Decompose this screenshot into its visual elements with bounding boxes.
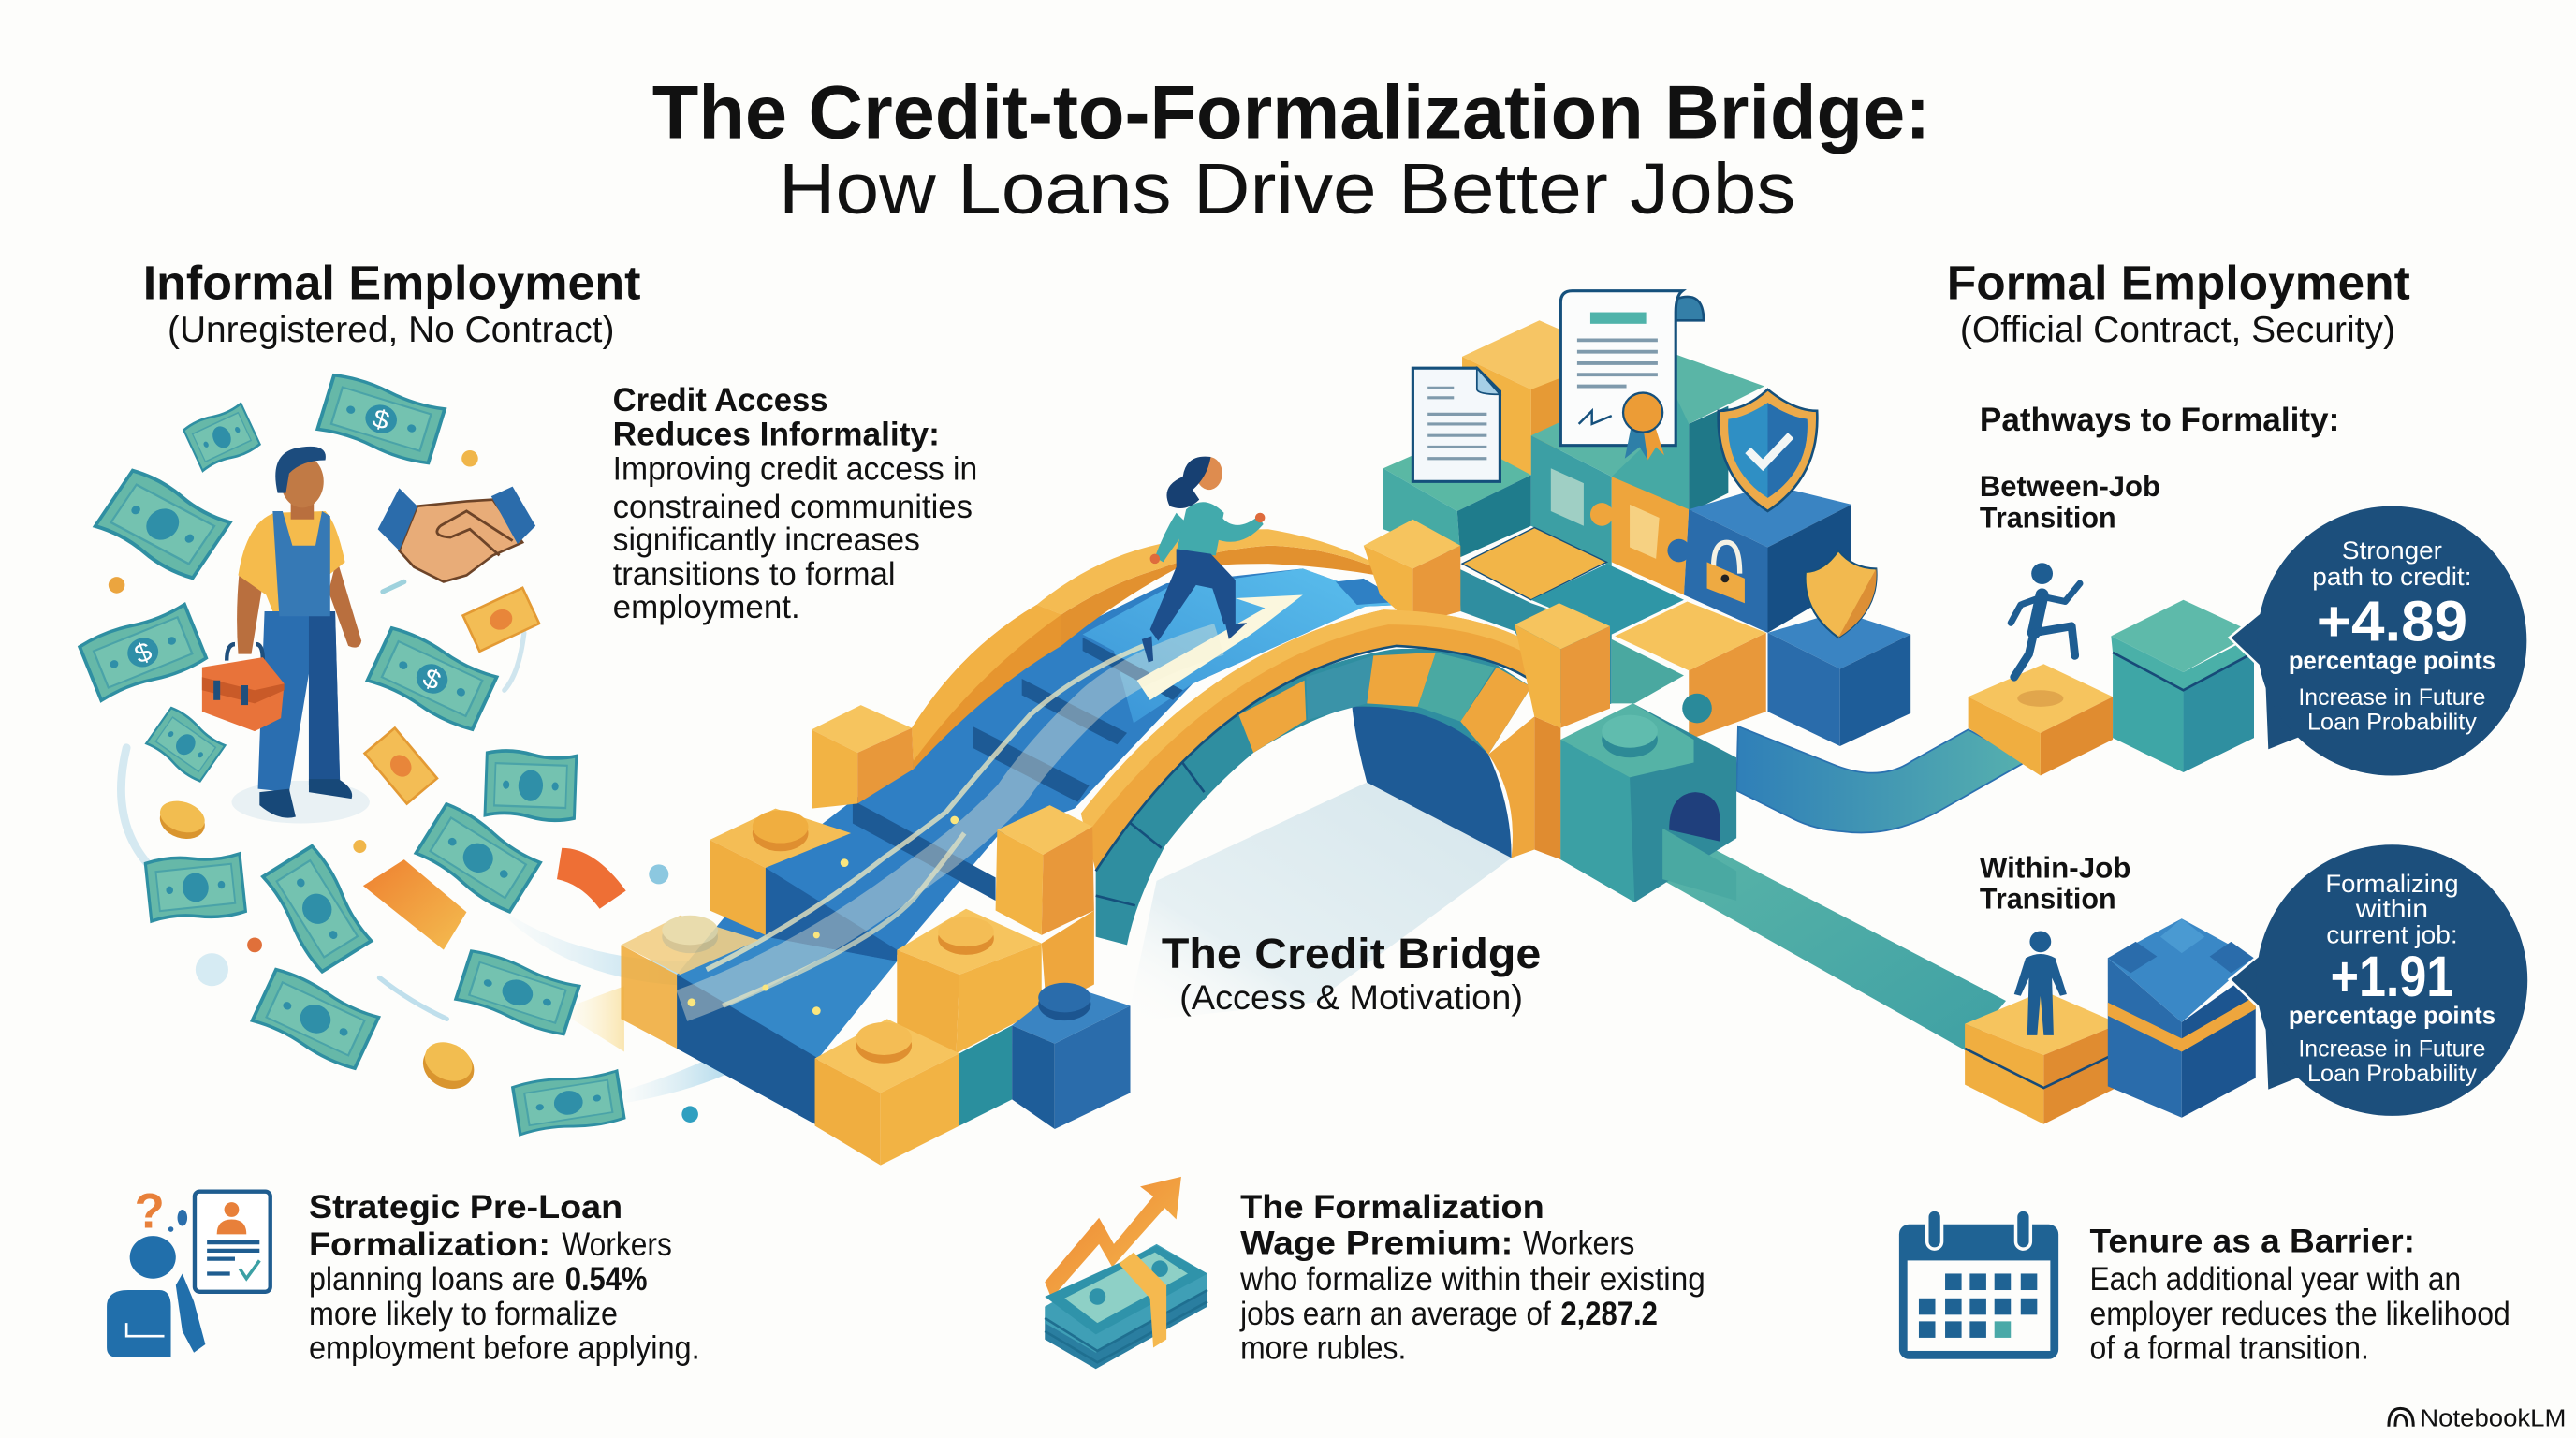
text: within-job transition: [1980, 850, 2130, 916]
block: blue castle: [2108, 918, 2256, 1118]
teal floor tile: [1531, 564, 1684, 635]
scattered money bills: [79, 373, 624, 1137]
callout: between-job stat: [2230, 506, 2526, 776]
icon: blue shield with check: [1719, 389, 1817, 511]
bridge: pier: [1488, 716, 1560, 859]
text: tenure as a barrier: Tenure as a Barrier:: [2089, 1224, 2415, 1260]
callout: within-job stat: Formalizing: [2325, 869, 2459, 898]
block: yellow with stud: [897, 909, 1042, 1053]
text: strategic pre-loan formalization: employment before applying.: [309, 1330, 700, 1367]
callout: between-job stat: percentage points: [2289, 646, 2496, 674]
legs: [258, 611, 340, 792]
text: the formalization wage premium: The Formalization: [1240, 1189, 1544, 1225]
shadow under bridge: [1127, 783, 1512, 1022]
heading: formal employment: Formal Employment: [1947, 256, 2410, 309]
bridge walkway and steps: [677, 568, 1403, 1125]
yellow diamond tile: [1462, 527, 1606, 600]
icon: thinking worker with form: [107, 1183, 271, 1357]
icon: padlock: [1707, 542, 1745, 603]
text: the formalization wage premium: 2,287.2: [1560, 1296, 1658, 1332]
callout: within-job stat: within: [2355, 894, 2428, 923]
text: between-job transition: [1980, 469, 2160, 534]
text: within-job transition: Transition: [1980, 882, 2116, 916]
label: the credit bridge: The Credit Bridge: [1162, 930, 1541, 977]
text: the formalization wage premium: who formalize within their existing: [1239, 1261, 1705, 1298]
callout: between-job stat: Increase in Future: [2298, 685, 2485, 711]
text block: credit access reduces informality: significantly increases: [613, 521, 920, 558]
text: the formalization wage premium: jobs earn an average of: [1239, 1296, 1551, 1332]
glowing flow arrow: [681, 594, 1303, 1015]
heading: informal employment: [143, 256, 641, 350]
orange puzzle tile: [1551, 468, 1689, 594]
logo: notebooklm: NotebookLM: [2420, 1404, 2566, 1432]
heading: informal employment: (Unregistered, No Contract): [168, 310, 614, 350]
title: [652, 70, 1930, 229]
label: the credit bridge: [1162, 930, 1541, 1017]
shirt: [238, 511, 345, 611]
yellow puzzle cube: [1612, 601, 1766, 740]
bridge: arch voussoirs: [1096, 649, 1531, 945]
text block: credit access reduces informality: constrained communities: [613, 489, 973, 525]
scattered money bills: $: [418, 663, 446, 697]
blue lock cube: [1667, 485, 1852, 633]
block: yellow front: [815, 1019, 959, 1166]
tall teal block: [1531, 348, 1764, 567]
post: far arch: [1364, 520, 1460, 624]
floor under the stack: [1459, 568, 1612, 723]
block: yellow step, between-job: [1969, 664, 2113, 776]
arms: [237, 567, 263, 654]
orange paper pieces: [363, 848, 626, 950]
text: tenure as a barrier: of a formal transition.: [2089, 1330, 2369, 1367]
icon: standing person: [2014, 931, 2067, 1035]
post: lower far arch: [812, 705, 914, 809]
block: translucent start step: [621, 916, 759, 1049]
callout: between-job stat: path to credit:: [2312, 562, 2472, 591]
figure: woman crossing bridge: [1142, 457, 1265, 662]
text: tenure as a barrier: employer reduces the likelihood: [2089, 1296, 2510, 1332]
heading: formal employment: [1947, 256, 2410, 350]
block: far-left yellow with stud: [710, 809, 851, 935]
title: The Credit-to-Formalization Bridge:: [652, 70, 1930, 154]
callout: within-job stat: [2230, 844, 2527, 1116]
block: blue with stud: [1012, 983, 1131, 1129]
post: near arch base: [996, 805, 1094, 935]
text: pathways to formality: Pathways to Formality:: [1980, 402, 2339, 438]
illustration: informal worker: [202, 447, 370, 823]
icon: contract with seal: [1560, 291, 1704, 461]
text: strategic pre-loan formalization: Workers: [562, 1226, 672, 1263]
block: teal step, between-job: [2111, 600, 2254, 772]
text: the formalization wage premium: [1239, 1189, 1705, 1367]
bridge: near parapet: [1081, 609, 1531, 871]
callout: within-job stat: Increase in Future: [2298, 1037, 2485, 1063]
text: tenure as a barrier: [2089, 1224, 2510, 1367]
icon: thinking worker with form: ?: [135, 1183, 165, 1239]
toolbox: [227, 644, 263, 661]
text: strategic pre-loan formalization: 0.54%: [565, 1261, 648, 1298]
post: top of arch: [1515, 603, 1610, 728]
pathway: curved band to between-job block: [1736, 726, 2027, 833]
text: strategic pre-loan formalization: [309, 1189, 700, 1367]
text block: credit access reduces informality: transitions to formal: [613, 556, 896, 593]
callout: within-job stat: current job:: [2326, 920, 2458, 949]
text: the formalization wage premium: more rubles.: [1240, 1330, 1406, 1367]
bib: [272, 511, 330, 616]
heading: informal employment: Informal Employment: [143, 256, 641, 309]
left teal cube: [1383, 435, 1531, 557]
bridge: arch underside: [1352, 703, 1512, 858]
text: within-job transition: Within-Job: [1980, 850, 2130, 884]
callout: between-job stat: Loan Probability: [2307, 710, 2478, 735]
text block: credit access reduces informality: Credit Access: [613, 382, 828, 418]
swirl lines: wind around worker: [121, 581, 524, 1019]
text block: credit access reduces informality: Reduces Informality:: [613, 417, 940, 453]
text: strategic pre-loan formalization: more likely to formalize: [309, 1296, 618, 1332]
back yellow cube: [1462, 320, 1577, 475]
text: the formalization wage premium: Workers: [1523, 1225, 1634, 1261]
callout: within-job stat: percentage points: [2289, 1002, 2496, 1030]
text block: credit access reduces informality: [613, 382, 977, 625]
text: between-job transition: Transition: [1980, 500, 2116, 534]
bridge: far parapet: [912, 529, 1403, 770]
icon: calendar: [1899, 1210, 2058, 1359]
callout: between-job stat: Stronger: [2342, 536, 2442, 565]
coins and dots: [109, 450, 698, 1123]
text: tenure as a barrier: Each additional year with an: [2089, 1261, 2461, 1298]
icon: rising arrow and cash stack: [1045, 1177, 1208, 1369]
heading: formal employment: (Official Contract, Security): [1960, 310, 2395, 350]
icon: yellow shield: [1806, 550, 1877, 638]
blue lower cube: [1767, 611, 1910, 746]
text: strategic pre-loan formalization: planning loans are: [309, 1261, 555, 1298]
scattered money bills: $: [369, 404, 392, 436]
swoosh into the bridge: [493, 903, 739, 1105]
icon: handshake: [378, 487, 535, 581]
title: How Loans Drive Better Jobs: [779, 149, 1795, 229]
callout: within-job stat: +1.91: [2331, 945, 2453, 1009]
callout: between-job stat: +4.89: [2317, 590, 2467, 654]
pathway: straight band to within-job block: [1661, 825, 2006, 1050]
text: strategic pre-loan formalization: Formalization:: [309, 1226, 550, 1263]
icon: small document: [1412, 368, 1500, 481]
scattered money bills: $: [131, 638, 156, 669]
icon: running person: [2011, 563, 2080, 677]
block: teal filler: [959, 1025, 1012, 1125]
text: the formalization wage premium: Wage Premium:: [1240, 1225, 1513, 1261]
isometric formal stack: [1383, 291, 1910, 746]
text: between-job transition: Between-Job: [1980, 469, 2160, 503]
text block: credit access reduces informality: Improving credit access in: [613, 451, 977, 488]
neck and head: [291, 493, 314, 520]
block: yellow step, within-job: [1965, 991, 2119, 1124]
pier under near arch: [1042, 911, 1094, 1009]
callout: within-job stat: Loan Probability: [2307, 1062, 2478, 1087]
teal cube with tunnel: [1560, 703, 1736, 902]
label: the credit bridge: (Access & Motivation): [1179, 978, 1523, 1017]
text block: credit access reduces informality: employment.: [613, 589, 800, 625]
text: strategic pre-loan formalization: Strategic Pre-Loan: [309, 1189, 622, 1225]
